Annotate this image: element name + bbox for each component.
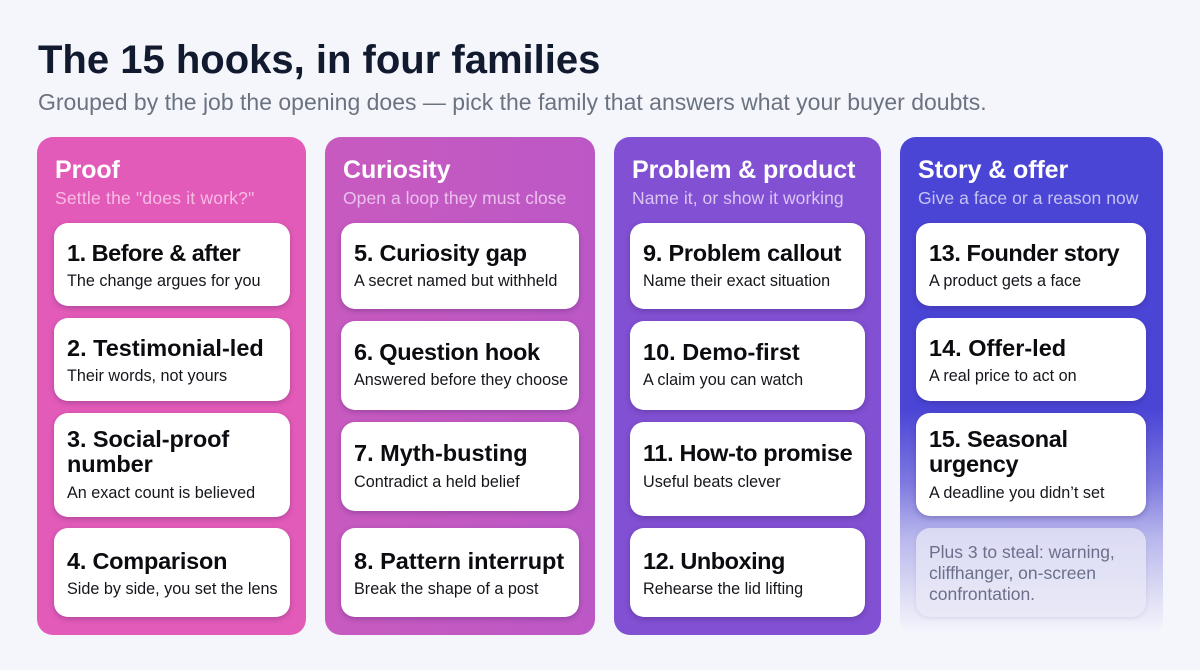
card 10 (630, 321, 865, 410)
card 10: 10. Demo-first (643, 339, 800, 365)
card 5: A secret named but withheld (354, 272, 557, 290)
panel: Curiosity (325, 137, 595, 635)
note card: Plus 3 to steal: warning, (929, 542, 1115, 562)
card 13 (916, 223, 1146, 306)
card 10: A claim you can watch (643, 371, 803, 389)
note card: confrontation. (929, 584, 1035, 604)
card 4: Side by side, you set the lens (67, 580, 278, 598)
card 6: Answered before they choose (354, 371, 568, 389)
card 12: 12. Unboxing (643, 548, 785, 574)
card 14: A real price to act on (929, 367, 1077, 385)
panel: Problem & product (614, 137, 881, 635)
card 12: Rehearse the lid lifting (643, 580, 803, 598)
heading: Curiosity: Curiosity (343, 156, 450, 184)
card 7: Contradict a held belief (354, 473, 520, 491)
card 6 (341, 321, 579, 410)
subheading: Story & offer: Give a face or a reason now (918, 188, 1138, 208)
note card: cliffhanger, on-screen (929, 563, 1096, 583)
card 8 (341, 528, 579, 617)
card 15 (916, 413, 1146, 516)
card 2: 2. Testimonial-led (67, 335, 264, 361)
card 7 (341, 422, 579, 511)
card 1 (54, 223, 290, 306)
heading: Proof: Proof (55, 156, 120, 184)
panel: Story & offer (900, 137, 1163, 635)
card 1: 1. Before & after (67, 240, 240, 266)
subheading: Proof: Settle the "does it work?" (55, 188, 255, 208)
card 7: 7. Myth-busting (354, 440, 528, 466)
card 2: Their words, not yours (67, 367, 227, 385)
heading: Problem & product: Problem & product (632, 156, 855, 184)
card 4: 4. Comparison (67, 548, 227, 574)
subheading: Problem & product: Name it, or show it working (632, 188, 844, 208)
card 14 (916, 318, 1146, 401)
heading: Story & offer: Story & offer (918, 156, 1068, 184)
card 3 (54, 413, 290, 517)
card 12 (630, 528, 865, 617)
card 8: Break the shape of a post (354, 580, 538, 598)
card 4 (54, 528, 290, 617)
card 3: 3. Social-proof (67, 426, 229, 452)
panel: Proof (37, 137, 306, 635)
card 5: 5. Curiosity gap (354, 240, 527, 266)
card 8: 8. Pattern interrupt (354, 548, 564, 574)
card 15: A deadline you didn’t set (929, 484, 1104, 502)
card 14: 14. Offer-led (929, 335, 1066, 361)
card 13: 13. Founder story (929, 240, 1119, 266)
note card (916, 528, 1146, 617)
card 11: 11. How-to promise (643, 440, 852, 466)
card 11 (630, 422, 865, 516)
subtitle: Grouped by the job the opening does — pick the family that answers what your buyer doubts. (38, 89, 987, 115)
card 1: The change argues for you (67, 272, 260, 290)
card 9: 9. Problem callout (643, 240, 841, 266)
card 3: An exact count is believed (67, 484, 255, 502)
card 15: 15. Seasonal (929, 426, 1068, 452)
card 6: 6. Question hook (354, 339, 540, 365)
card 2 (54, 318, 290, 401)
card 11: Useful beats clever (643, 473, 781, 491)
card 3: number (67, 451, 153, 477)
card 15: urgency (929, 451, 1018, 477)
subheading: Curiosity: Open a loop they must close (343, 188, 566, 208)
card 5 (341, 223, 579, 309)
card 9 (630, 223, 865, 309)
card 13: A product gets a face (929, 272, 1081, 290)
title: The 15 hooks, in four families (38, 38, 600, 82)
card 9: Name their exact situation (643, 272, 830, 290)
